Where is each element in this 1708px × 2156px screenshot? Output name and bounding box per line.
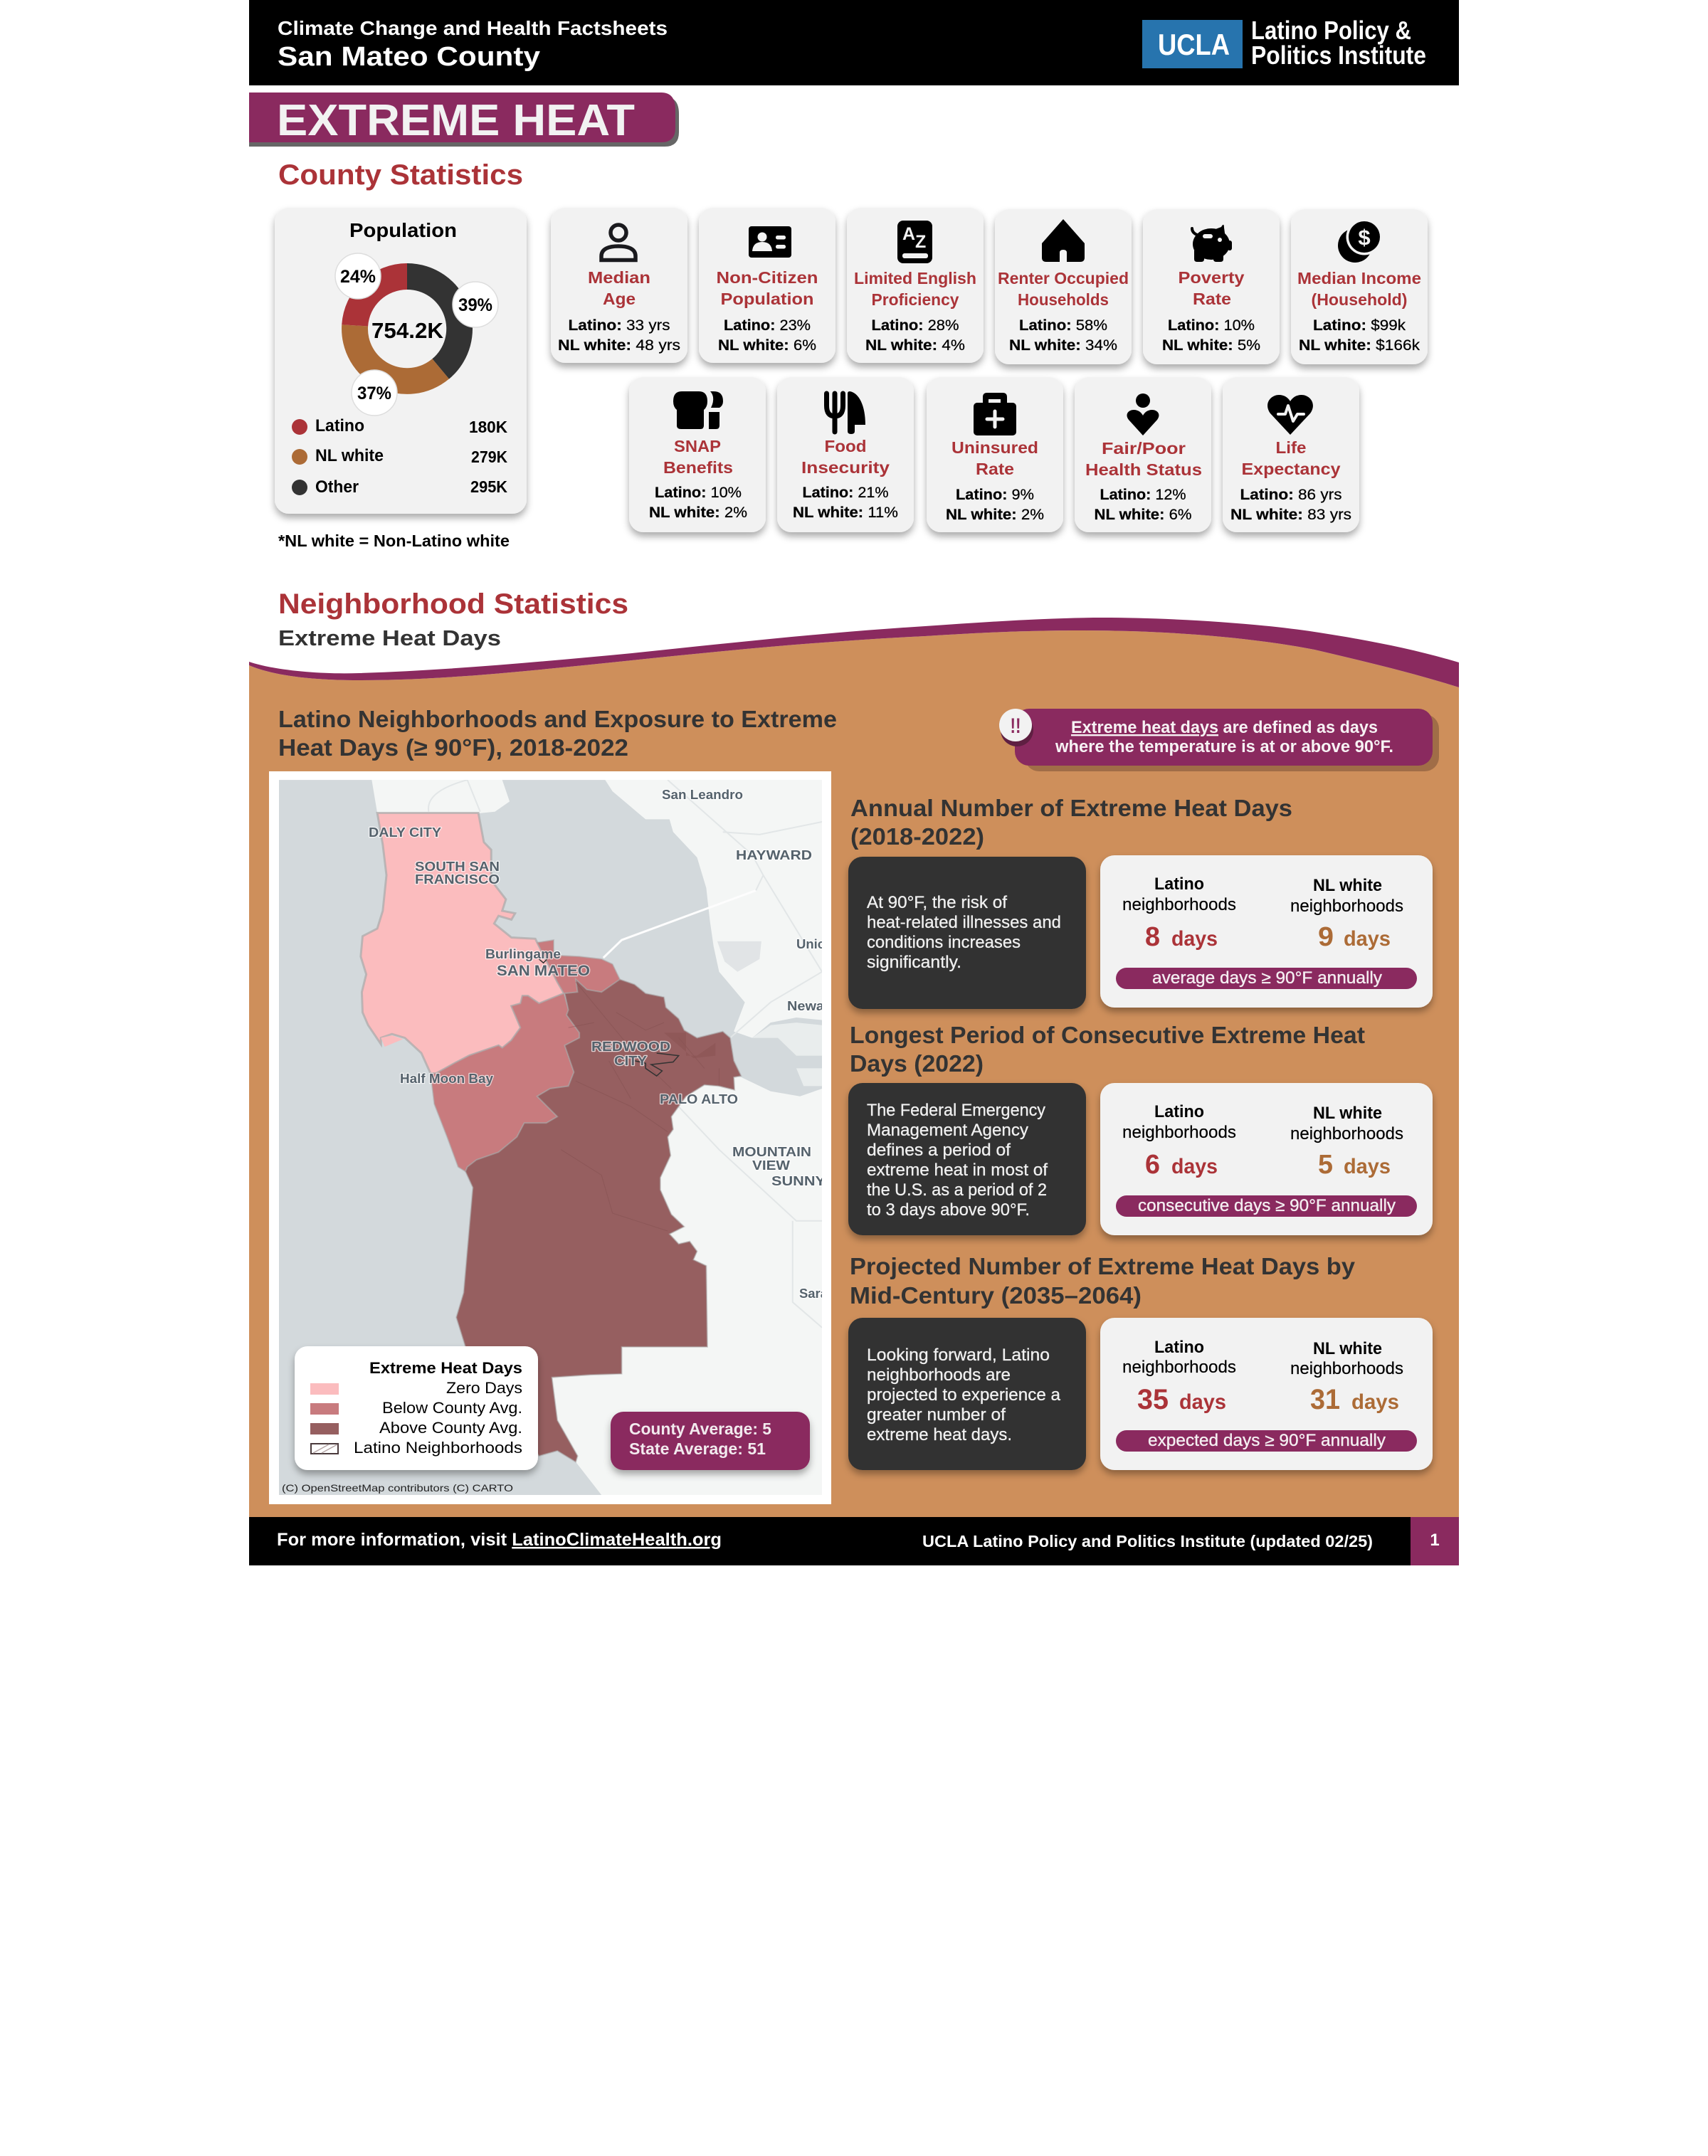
- card: median income: [1291, 209, 1428, 364]
- map labels: PALO ALTO: [660, 1092, 738, 1106]
- icon: fork and knife: [827, 391, 865, 434]
- map labels: CITY: [614, 1054, 647, 1068]
- map labels: Half Moon Bay: [400, 1072, 493, 1086]
- map labels: San Leandro: [662, 788, 743, 802]
- section heading: Days (2022): [850, 1050, 984, 1077]
- footer bar: For more information, visit LatinoClimateHealth.org: [277, 1530, 722, 1550]
- comparison card: neighborhoods: [1290, 1124, 1403, 1143]
- comparison card: 6: [1145, 1150, 1160, 1180]
- explanation box: Looking forward, Latino: [867, 1346, 1050, 1365]
- county: zero days: [361, 813, 564, 1074]
- comparison card: neighborhoods: [1122, 1123, 1236, 1142]
- explanation box: [848, 857, 1086, 1009]
- footer bar: [249, 1517, 1459, 1565]
- card: snap benefits: Latino: 10%: [655, 484, 742, 501]
- card: food insecurity: NL white: 11%: [793, 504, 898, 521]
- explanation box: [848, 1318, 1086, 1470]
- comparison card: 8: [1145, 922, 1160, 952]
- section heading: [850, 1022, 1365, 1077]
- icon: a-z book: [897, 221, 932, 263]
- section heading: Projected Number of Extreme Heat Days by: [850, 1253, 1356, 1279]
- explanation box: At 90°F, the risk of: [867, 893, 1007, 912]
- icon: a-z book: Z: [915, 232, 926, 252]
- comparison card: expected days ≥ 90°F annually: [1148, 1431, 1386, 1450]
- donut chart: 39%: [458, 295, 492, 315]
- card: median age: [551, 208, 687, 363]
- icon: a-z book: A: [902, 224, 915, 244]
- card: renter occupied households: Renter Occupied: [998, 269, 1129, 287]
- population legend: 279K: [471, 448, 507, 466]
- comparison card: Latino: [1154, 1338, 1204, 1357]
- card: snap benefits: [629, 377, 766, 532]
- heading: map title: Heat Days (≥ 90°F), 2018-2022: [278, 734, 628, 761]
- card: life expectancy: Latino: 86 yrs: [1240, 486, 1342, 503]
- water: pacific and bay: [279, 780, 822, 1495]
- card: life expectancy: [1223, 377, 1359, 532]
- icon: house: [1042, 219, 1085, 262]
- map labels: SUNNY: [771, 1174, 826, 1188]
- county and state average box: State Average: 51: [629, 1439, 766, 1458]
- heading: neighborhood statistics: Extreme Heat Days: [278, 625, 501, 650]
- latino neighborhood outline: [539, 959, 679, 1076]
- callout: definition of extreme heat days: where the temperature is at or above 90°F.: [1055, 737, 1393, 756]
- explanation box: significantly.: [867, 953, 961, 972]
- icon: exclamation badge: [999, 709, 1033, 746]
- explanation box: Management Agency: [867, 1121, 1028, 1140]
- map legend: Extreme Heat Days: [369, 1359, 522, 1377]
- card: snap benefits: Benefits: [663, 458, 733, 477]
- card: snap benefits: SNAP: [674, 437, 721, 455]
- section heading: Mid-Century (2035–2064): [850, 1282, 1142, 1309]
- card: food insecurity: [777, 377, 914, 532]
- comparison card: neighborhoods: [1290, 1359, 1403, 1378]
- card: food insecurity: Food: [824, 437, 867, 455]
- card: limited english proficiency: [847, 208, 984, 363]
- map labels: Burlingame: [485, 947, 561, 961]
- comparison card: NL white: [1313, 1339, 1382, 1358]
- map labels: VIEW: [752, 1158, 790, 1173]
- population legend: 180K: [469, 418, 507, 436]
- card: non-citizen population: [699, 208, 835, 363]
- card: limited english proficiency: Proficiency: [871, 290, 959, 309]
- card: life expectancy: NL white: 83 yrs: [1230, 506, 1351, 523]
- section heading: (2018-2022): [850, 823, 984, 850]
- section heading: [850, 1253, 1356, 1309]
- UCLA logo: UCLA: [1158, 28, 1230, 61]
- card: life expectancy: Expectancy: [1241, 460, 1341, 478]
- map labels: [369, 788, 828, 1301]
- comparison card: NL white: [1313, 876, 1382, 895]
- icon: person with heart: [1127, 393, 1159, 435]
- county: below average: [431, 940, 620, 1171]
- card: renter occupied households: NL white: 34%: [1009, 337, 1117, 354]
- comparison card: Latino: [1154, 1102, 1204, 1121]
- card: median income: (Household): [1311, 290, 1408, 309]
- map labels: MOUNTAIN: [732, 1145, 811, 1159]
- map labels: Unic: [796, 937, 825, 951]
- comparison card: [1100, 855, 1433, 1008]
- comparison card: 5: [1318, 1150, 1333, 1180]
- icon: bread: [673, 391, 723, 429]
- population legend: Latino: [315, 416, 364, 435]
- card: fair/poor health status: Fair/Poor: [1102, 439, 1186, 458]
- map panel: [269, 771, 831, 1504]
- footnote: *NL white = Non-Latino white: [278, 532, 510, 550]
- section heading: Longest Period of Consecutive Extreme Heat: [850, 1022, 1365, 1048]
- page number: 1: [1430, 1531, 1440, 1550]
- map labels: Newa: [787, 999, 825, 1013]
- map legend: Zero Days: [446, 1379, 522, 1397]
- comparison card: consecutive days ≥ 90°F annually: [1138, 1196, 1396, 1215]
- card: median income: Latino: $99k: [1313, 317, 1406, 334]
- card: poverty rate: Latino: 10%: [1168, 317, 1255, 334]
- comparison card: Latino: [1154, 874, 1204, 894]
- card: uninsured rate: Latino: 9%: [956, 486, 1034, 503]
- map legend: Latino Neighborhoods: [354, 1439, 522, 1457]
- card: poverty rate: Rate: [1193, 290, 1231, 308]
- callout: definition of extreme heat days: Extreme heat days are defined as days: [1071, 718, 1378, 737]
- donut chart: 754.2K: [371, 318, 444, 343]
- icon: id card: [749, 226, 791, 258]
- icon: heartbeat: [1267, 395, 1313, 435]
- map legend: Above County Avg.: [379, 1419, 522, 1437]
- card: median age: Median: [588, 268, 650, 287]
- card: snap benefits: NL white: 2%: [649, 504, 747, 521]
- comparison card: 9: [1318, 922, 1334, 952]
- card: food insecurity: Latino: 21%: [803, 484, 888, 501]
- card: uninsured rate: Rate: [976, 460, 1014, 478]
- map labels: REDWOOD: [591, 1040, 670, 1054]
- panel: population: [275, 208, 527, 514]
- wetlands: [752, 1022, 822, 1086]
- heading: neighborhood statistics: Neighborhood Statistics: [278, 588, 628, 620]
- explanation box: heat-related illnesses and: [867, 913, 1061, 932]
- map labels: FRANCISCO: [415, 872, 500, 887]
- explanation box: extreme heat days.: [867, 1425, 1012, 1444]
- card: non-citizen population: Latino: 23%: [724, 317, 811, 334]
- population legend: NL white: [315, 446, 384, 465]
- map legend: Below County Avg.: [382, 1399, 522, 1417]
- UCLA logo: Latino Policy &: [1251, 16, 1411, 45]
- card: median age: Age: [603, 290, 636, 308]
- comparison card: days: [1344, 927, 1391, 951]
- comparison card: [1100, 1083, 1433, 1235]
- card: limited english proficiency: Latino: 28%: [871, 317, 959, 334]
- card: median income: Median Income: [1297, 269, 1421, 287]
- donut chart: [335, 253, 498, 416]
- tract lines: [561, 982, 719, 1231]
- explanation box: defines a period of: [867, 1141, 1011, 1160]
- callout: definition of extreme heat days: [999, 709, 1439, 771]
- section: annual number of extreme heat days: [848, 795, 1433, 1009]
- explanation box: to 3 days above 90°F.: [867, 1200, 1030, 1220]
- card: uninsured rate: [927, 377, 1063, 532]
- card: poverty rate: NL white: 5%: [1162, 337, 1260, 354]
- icon: piggy bank: [1192, 225, 1232, 262]
- orange background panel with wave: [249, 630, 1459, 1517]
- UCLA logo: [1142, 16, 1426, 70]
- bridge road: [603, 890, 756, 958]
- comparison card: neighborhoods: [1122, 1358, 1236, 1377]
- county and state average box: [611, 1412, 810, 1470]
- header title: San Mateo County: [278, 42, 540, 72]
- explanation box: extreme heat in most of: [867, 1161, 1048, 1180]
- card: fair/poor health status: Health Status: [1085, 460, 1202, 479]
- card: poverty rate: Poverty: [1179, 268, 1245, 287]
- land roads: [428, 780, 822, 1328]
- explanation box: The Federal Emergency: [867, 1101, 1045, 1120]
- explanation box: conditions increases: [867, 933, 1021, 952]
- comparison card: days: [1351, 1390, 1399, 1414]
- section: longest period of consecutive extreme heat days: [848, 1022, 1433, 1235]
- card: uninsured rate: NL white: 2%: [946, 506, 1044, 523]
- card: non-citizen population: Non-Citizen: [716, 268, 818, 287]
- map labels: SAN MATEO: [497, 963, 590, 979]
- header title: [278, 17, 668, 72]
- county: above average: [456, 979, 741, 1462]
- population legend: [292, 416, 507, 497]
- county and state average box: County Average: 5: [629, 1420, 771, 1438]
- card: food insecurity: Insecurity: [801, 458, 890, 477]
- header bar: [249, 0, 1459, 85]
- explanation box: [848, 1083, 1086, 1235]
- map labels: Sara: [799, 1286, 828, 1301]
- comparison card: neighborhoods: [1290, 897, 1403, 916]
- population legend: Other: [315, 477, 359, 497]
- comparison card: days: [1179, 1390, 1226, 1414]
- donut chart: 37%: [357, 384, 391, 403]
- card: poverty rate: [1143, 209, 1280, 364]
- card: fair/poor health status: [1075, 377, 1211, 532]
- card: uninsured rate: Uninsured: [951, 438, 1038, 457]
- map labels: DALY CITY: [369, 825, 441, 840]
- heading: neighborhood statistics: [278, 588, 628, 650]
- comparison card: [1100, 1318, 1433, 1470]
- icon: person: [601, 225, 636, 260]
- card: fair/poor health status: Latino: 12%: [1100, 486, 1186, 503]
- topic banner: extreme heat: EXTREME HEAT: [277, 96, 635, 145]
- card: non-citizen population: Population: [720, 290, 814, 308]
- heading: map title: Latino Neighborhoods and Exposure to Extreme: [278, 706, 837, 732]
- purple wave band: [249, 618, 1459, 687]
- card: non-citizen population: NL white: 6%: [718, 337, 816, 354]
- card: renter occupied households: Latino: 58%: [1019, 317, 1107, 334]
- heading: map title: [278, 706, 837, 761]
- page number: [1411, 1517, 1459, 1565]
- card: renter occupied households: [995, 209, 1132, 364]
- icon: coins: $: [1358, 225, 1371, 250]
- header title: Climate Change and Health Factsheets: [278, 17, 668, 39]
- section heading: Annual Number of Extreme Heat Days: [850, 795, 1292, 821]
- icon: coins: [1338, 219, 1382, 263]
- card: limited english proficiency: Limited English: [854, 269, 976, 287]
- explanation box: neighborhoods are: [867, 1365, 1011, 1385]
- card: limited english proficiency: NL white: 4%: [865, 337, 965, 354]
- heading: county statistics: County Statistics: [278, 159, 523, 191]
- card: median income: NL white: $166k: [1299, 337, 1420, 354]
- icon: exclamation badge: !!: [1011, 714, 1021, 738]
- attribution: (C) OpenStreetMap contributors (C) CARTO: [282, 1482, 513, 1494]
- comparison card: 31: [1310, 1384, 1340, 1415]
- map legend: [295, 1346, 538, 1470]
- donut chart: 24%: [340, 267, 376, 287]
- section: projected number of extreme heat days: [848, 1253, 1433, 1470]
- panel: population: Population: [349, 219, 457, 241]
- comparison card: 35: [1137, 1384, 1169, 1415]
- icon: first aid kit: [974, 393, 1016, 435]
- comparison card: average days ≥ 90°F annually: [1152, 968, 1382, 988]
- comparison card: days: [1171, 927, 1218, 951]
- comparison card: neighborhoods: [1122, 895, 1236, 914]
- section heading: [850, 795, 1292, 850]
- card: median age: NL white: 48 yrs: [558, 337, 680, 354]
- card: renter occupied households: Households: [1018, 290, 1109, 309]
- map: [279, 780, 828, 1495]
- comparison card: NL white: [1313, 1104, 1382, 1123]
- population legend: 295K: [470, 477, 507, 496]
- footer bar: UCLA Latino Policy and Politics Institute (updated 02/25): [922, 1532, 1373, 1550]
- map labels: SOUTH SAN: [415, 860, 500, 874]
- comparison card: days: [1344, 1155, 1391, 1178]
- explanation box: projected to experience a: [867, 1385, 1061, 1405]
- card: fair/poor health status: NL white: 6%: [1095, 506, 1191, 523]
- explanation box: greater number of: [867, 1405, 1006, 1425]
- explanation box: the U.S. as a period of 2: [867, 1180, 1047, 1200]
- UCLA logo: Politics Institute: [1251, 41, 1426, 70]
- comparison card: days: [1171, 1155, 1218, 1178]
- card: median age: Latino: 33 yrs: [568, 317, 670, 334]
- card: life expectancy: Life: [1275, 438, 1307, 457]
- map labels: HAYWARD: [736, 848, 812, 862]
